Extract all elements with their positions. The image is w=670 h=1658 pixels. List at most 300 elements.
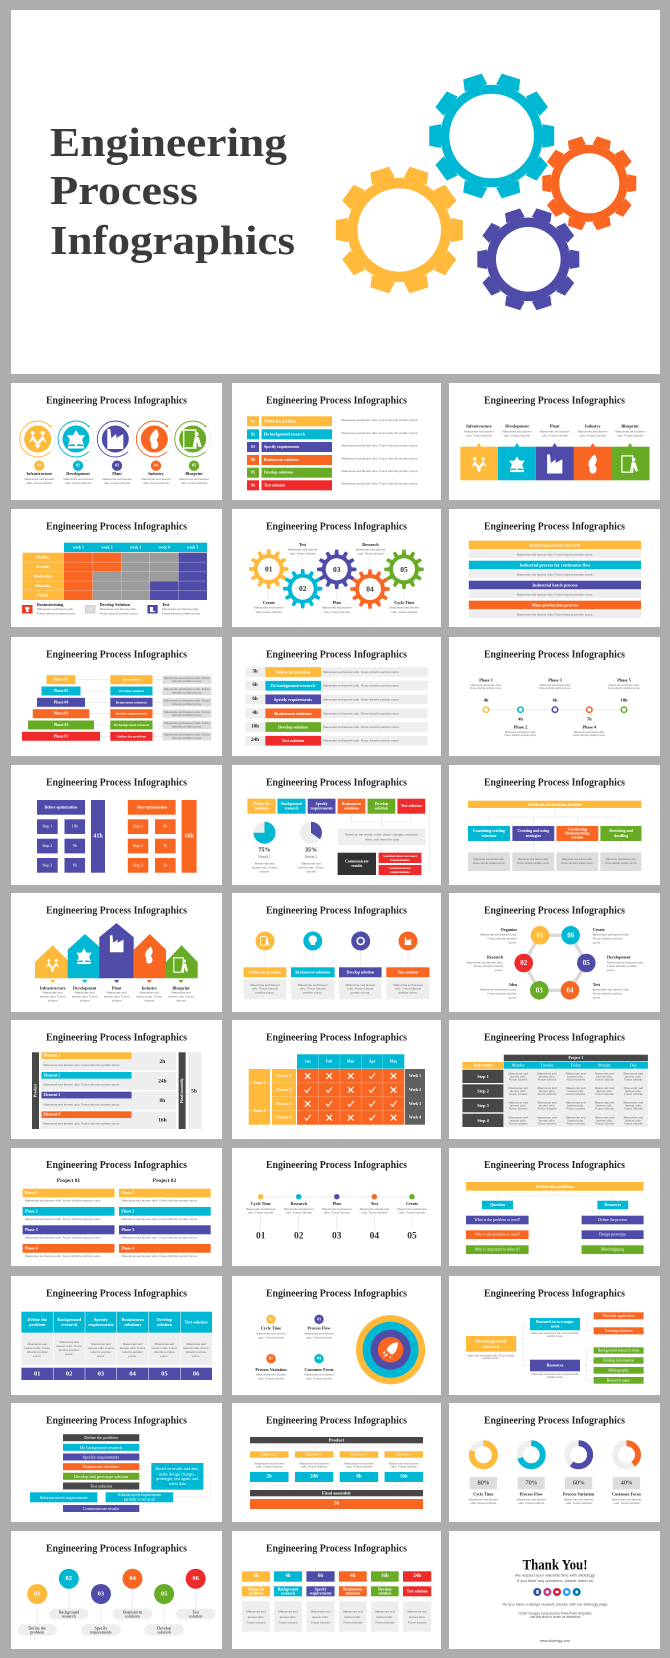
vertical bar: Final assembly: Final assembly [180,1078,184,1103]
deliverable cell: Deliverable [473,1063,493,1067]
arrow: Infrastructure: lobortis [48,998,58,1002]
box: Conducting Brainstorming session [556,826,598,871]
panel: five interlocking gears [232,509,441,627]
balloon 01: problem [30,1630,45,1634]
panel title: Engineering Process Infographics [484,650,625,660]
element 2: Maecenas sed laoreet odio. Fusce lobortis porttitor purus. [44,1083,120,1087]
top process boxes [247,799,425,814]
numbered bar 02 [247,429,418,439]
weeks: Week 4 [409,1116,421,1120]
numbered bar 05 [247,468,418,478]
row: Test solution: Test solution [282,738,305,743]
product bar [250,1437,423,1443]
row: Develop solution [245,722,428,732]
icon: four gears [336,73,636,311]
panel: numbered dot timeline [232,1148,441,1266]
top process boxes: requirements [311,807,333,811]
column headers: Background [57,1317,81,1322]
label: Plan: Plan [333,600,342,605]
column: Brainstorm solutions: Fusce lobortis [343,1620,363,1624]
check grid [249,1054,425,1125]
box: Examining existing solutions: Maecenas sed laoreet odio. [474,858,505,861]
descriptions: Maecenas sed laoreet odio. Fusce [164,710,210,714]
column: Brainstorm solutions: Brainstorm [343,1587,363,1591]
connectors [498,1191,613,1245]
element 2: odio. Fusce lobortis [301,1465,328,1469]
circle step: Infrastructure: Maecenas sed laoreet [25,477,54,481]
panel: five house arrows [11,893,222,1012]
box: Creating and using analogies: Creating and using [517,829,549,833]
circle step: Blueprint [167,414,218,485]
table header: weeks: week 2 [101,545,113,549]
website: www.slideegg.com [540,1639,570,1643]
column: Specify requirements: Specify [314,1587,327,1591]
resources branch: Resources [547,1364,564,1368]
step 03: 03 [332,1232,342,1242]
solution meets requirements [379,865,421,875]
block: Infrastructure: odio. Fusce lobortis [466,434,493,438]
numbered bar 06 [247,480,418,490]
solution does not meet requirements: Solution does not meet [383,854,418,858]
panel title: Engineering Process Infographics [484,1160,625,1171]
donut: Cycle Time 80%: odio. Fusce lobortis [470,1501,497,1505]
descriptions: lobortis porttitor purus. [172,724,202,728]
solution partially meets requirements: partially or not at all [124,1497,155,1501]
resources list: Mind mapping [601,1248,624,1252]
table days column: Friday [37,593,49,597]
project 02 column: Phase 2 [122,1209,134,1213]
card: Define the problem: Maecenas sed laoreet [250,983,280,987]
element 4 [385,1451,423,1482]
month header [297,1054,404,1069]
donut: Process Variation 60%: Maecenas sed laoreet [564,1497,594,1501]
phase 4: Phase 4 [582,724,597,730]
panel: before and after optimization [11,765,222,885]
column: Brainstorm solutions: solutions [345,1591,361,1595]
step 04 [360,1194,389,1242]
block: Industry: odio. Fusce lobortis [580,434,606,438]
balloon 02 [49,1569,88,1619]
metric: Cycle Time: 01 [269,1317,273,1321]
balloon 06: solution [189,1614,203,1618]
description row: purus. [192,1354,200,1358]
before optimization group: 8h [73,863,77,867]
descriptions: Maecenas sed laoreet odio. Fusce [164,687,210,691]
pie: 75 percent: 75% [258,847,270,853]
description row: Maecenas sed [186,1342,206,1346]
top process boxes: problem [255,807,269,811]
description grid: Maecenas sed [595,1115,615,1119]
description grid: Maecenas sed [624,1115,643,1119]
panel title: Engineering Process Infographics [46,650,187,660]
column: Test solution: Test solution [407,1589,428,1593]
element 2: Element 2 [44,1073,60,1077]
block: Development [498,424,536,480]
description grid: Fusce lobortis [538,1107,557,1111]
vertical bar: Product [32,1052,39,1129]
description grid: Fusce lobortis [538,1121,557,1125]
description grid: laoreet odio. [568,1104,584,1108]
project 01 column: Phase 1 [25,1191,38,1195]
description row: lobortis porttitor [154,1350,175,1354]
description grid: laoreet odio. [596,1104,613,1108]
panel: industrial process bars [449,509,660,627]
description grid: Maecenas sed [508,1101,528,1105]
row: Specify requirements: Maecenas sed laoreet odio. Fusce lobortis porttitor purus. [323,697,400,701]
column headers [21,1312,212,1333]
card: Develop solution: porttitor purus. [351,991,370,995]
box: Creating and using analogies: Fusce lobortis porttitor purus. [517,862,550,865]
step column [462,1070,503,1127]
flow connectors [352,806,430,870]
numbered bar 06: Test solution [264,483,286,487]
arrow: Industry: Maecenas sed [140,990,159,994]
communicate results box: results [351,864,363,868]
block: Development: odio. Fusce lobortis [504,434,531,438]
month header: Feb [326,1060,332,1064]
label: Create: odio. Fusce lobortis [256,610,282,614]
stem lines [261,1216,412,1231]
card: Test solution [386,932,430,999]
label: Development: purus. [607,968,616,972]
top bar: Methods of ideation include [528,802,582,807]
descriptions: lobortis porttitor purus. [172,690,202,694]
step column: Step 2 [477,1088,489,1094]
card: Define the problem: odio. Fusce lobortis [252,987,279,991]
stems [37,1589,196,1624]
target with rocket [356,1315,425,1384]
box: Examining existing solutions: Fusce lobortis porttitor purus. [473,862,505,865]
row: Brainstorm solutions: Brainstorm solutions [274,711,312,716]
label: Organize: Fusce lobortis porttitor [487,936,517,940]
table header: weeks: week 1 [73,545,84,549]
gear 04 [350,569,390,609]
circle step: Blueprint: Blueprint [185,471,203,476]
description grid: laoreet odio. [625,1104,642,1108]
description row: purus. [65,1352,73,1356]
box: Conducting Brainstorming session: Brainstorming [565,832,590,836]
box: Sketching and doodling: Fusce lobortis porttitor purus. [605,862,637,865]
day header: Day [630,1063,637,1067]
bar: work: Industrial process for work [529,542,581,548]
element 2 [295,1451,333,1482]
before optimization group: Step 2 [42,844,52,848]
description row: Maecenas sed [59,1340,79,1344]
column: Test solution: Fusce lobortis [408,1620,427,1624]
metric: Cycle Time: odio. Fusce lobortis [258,1335,285,1339]
month header: May [390,1060,397,1064]
card: Brainstorm solutions: porttitor purus. [303,991,323,995]
element 4 [41,1111,176,1129]
balloon 04: 04 [129,1575,136,1582]
pyramid [22,675,100,741]
description grid: laoreet odio. [539,1089,555,1093]
panel title: Engineering Process Infographics [266,396,407,406]
final hours bar [250,1499,423,1509]
label: Research: purus. [495,968,504,972]
block: Blueprint: Maecenas sed laoreet [615,430,645,434]
description grid: laoreet odio. [625,1118,642,1122]
arrow: Development: Development [73,986,97,990]
panel title: Engineering Process Infographics [46,522,187,532]
step 04: Maecenas sed laoreet [360,1207,389,1211]
description row: laoreet odio. Fusce [88,1346,114,1350]
root box: Maecenas sed laoreet odio. Fusce lobortis [468,1354,515,1358]
label: Idea: purus. [509,995,517,999]
description grid: Maecenas sed [508,1086,528,1090]
arrow: Plant: Plant [112,986,122,990]
panel title: Engineering Process Infographics [46,1160,187,1171]
column headers: solutions [124,1322,141,1327]
table grid [23,553,207,600]
panel: hour rows [232,637,441,756]
connectors [516,1316,594,1380]
label: Test [288,542,318,556]
description grid: laoreet odio. [596,1118,613,1122]
step 02: Maecenas sed laoreet [284,1207,314,1211]
bar: work [469,541,641,558]
block: Infrastructure: Maecenas sed laoreet [464,430,494,434]
row: Specify requirements: Specify requirements [274,697,312,702]
panel: four donuts [449,1403,660,1522]
description row: laoreet odio. Fusce [25,1346,50,1350]
balloon 04: solutions [125,1614,140,1618]
row: Brainstorm solutions [245,708,428,718]
metric: Process Variation: 02 [269,1357,273,1361]
hero title: Engineering [50,119,288,165]
pyramid: Phase 04 [54,700,68,704]
card: Test solution: odio. Fusce lobortis [395,987,422,991]
label: Plan [322,600,352,614]
panel: five circles with icons [11,383,222,500]
description grid: laoreet odio. [596,1074,613,1078]
project 02 column [119,1178,211,1258]
solution does not meet requirements [379,853,421,863]
description grid: Fusce lobortis [595,1121,614,1125]
description row: purus. [97,1354,105,1358]
row: Define the problem: 3h [252,670,258,674]
top bar: Define the problem [536,1184,574,1189]
bar: batch [469,581,641,598]
circle step: Plant: odio. Fusce lobortis [104,481,131,485]
column: Background research: 4h [285,1574,291,1579]
description row: lobortis porttitor [27,1350,48,1354]
table days column [23,553,64,600]
solution meets requirements: Solution meets requirements [40,1495,88,1500]
research branch: porttitor purus. [547,1335,563,1338]
number row: 06 [193,1370,200,1377]
donut: Customer Focus 40% [612,1443,641,1505]
description grid: Maecenas sed [624,1101,643,1105]
step 03: odio. Fusce lobortis [324,1211,350,1215]
label: Research: Maecenas sed laoreet [356,548,385,552]
label: Cycle Time [390,600,419,614]
panel: two projects phases [11,1148,222,1266]
pie: 35 percent: lobortis [306,870,316,874]
label: Test: Test [299,542,307,547]
donut: Customer Focus 40%: Customer Focus [612,1492,641,1496]
element 1: 2h [267,1474,272,1480]
table header: weeks: week 3 [130,545,141,549]
legend: Brainstorming: Fusce lobortis porttitor purus. [37,612,76,616]
panel: product elements with hours [11,1020,222,1139]
arrow: Blueprint: Maecenas sed [171,990,191,994]
element 3: 8h [356,1474,362,1480]
processes [272,1069,296,1125]
legend: Brainstorming [22,602,76,616]
after optimization group: Step 1 [133,825,143,829]
phase 1: Fusce lobortis porttitor purus. [470,687,502,690]
question box [482,1201,513,1209]
description grid: Maecenas sed [624,1086,643,1090]
label: Research: Fusce lobortis porttitor [474,964,503,968]
project 02 column: Maecenas sed laoreet odio. Fusce lobortis porttitor purus. [122,1235,198,1239]
arrow: Industry: lobortis [144,998,155,1002]
column: Test solution [403,1571,431,1632]
donut: Process Variation 60%: Process Variation [563,1492,595,1496]
row: Do background research: 6h [252,683,258,688]
circle step: Development: 02 [76,464,80,468]
label: Test: odio. Fusce lobortis [290,552,316,556]
box: Sketching and doodling: Sketching and [609,829,634,833]
row: Define the problem [245,667,428,677]
node 03 [530,981,549,1000]
research branch: Maecenas sed laoreet odio. Fusce lobortis [532,1332,579,1335]
descriptions: Maecenas sed laoreet odio. Fusce [164,721,210,725]
solution partially meets requirements: Solution meets requirements [118,1493,162,1497]
description row: purus. [160,1354,169,1358]
step 05: Maecenas sed laoreet [397,1207,427,1211]
metric: Process Variation [255,1354,287,1381]
legend: Test: Test [162,602,170,607]
numbered bar 02: Maecenas sed laoreet odio. Fusce lobortis porttitor purus. [342,431,418,435]
feedback box: make design changes, [159,1472,196,1478]
metric: Customer Focus: Maecenas sed laoreet [304,1373,334,1377]
description grid: Maecenas sed [537,1101,557,1105]
credit note [518,1611,592,1619]
bar: continuous flow: Maecenas sed laoreet odio. Fusce lobortis porttitor purus. [517,572,593,576]
row: Test solution: 24h [251,738,259,743]
element 1: Maecenas sed laoreet odio. Fusce lobortis porttitor purus. [44,1063,120,1067]
column: Define the problem: 3h [253,1574,259,1579]
numbered bar 05: Maecenas sed laoreet odio. Fusce lobortis porttitor purus. [342,469,418,473]
description grid: laoreet odio. [510,1089,527,1093]
block: Plant: Plant [550,424,560,428]
row: Define the problem: Define the problem [276,670,311,674]
phase 1: Maecenas sed laoreet odio. [471,684,502,687]
top process boxes: Background [281,802,303,806]
pyramid: Phase 05 [54,689,68,693]
label: Development: Fusce lobortis porttitor [607,964,637,968]
circle step: Blueprint: odio. Fusce lobortis [181,481,208,485]
step labels: Define the problem [117,734,146,738]
panel title: Engineering Process Infographics [46,906,187,916]
label: Development: Development [607,954,631,960]
donut: Cycle Time 80% [469,1443,498,1505]
step 01: Cycle Time [251,1201,271,1206]
communicate results box [338,853,376,875]
description grid: Maecenas sed [537,1115,557,1119]
pyramid: Phase 02 [54,723,68,727]
green leaves: Finding information [603,1358,634,1362]
after optimization group: 8h [163,825,167,829]
description row: lobortis porttitor [59,1348,79,1352]
descriptions: Maecenas sed laoreet odio. Fusce [164,698,210,702]
element 4: Element 4 [44,1113,60,1117]
label: Idea: Idea [509,982,518,987]
description row: laoreet odio. Fusce [56,1344,82,1348]
after optimization group: 7h [163,844,167,848]
descriptions: lobortis porttitor purus. [172,713,202,717]
column: Develop solution [371,1571,399,1632]
gear 03 [317,550,356,589]
numbered bar 03: Maecenas sed laoreet odio. Fusce lobortis porttitor purus. [342,444,418,448]
panel: six numbered bars [232,383,441,500]
feedback box: retest data [169,1481,186,1486]
card: Brainstorm solutions: Brainstorm solutions [295,970,331,974]
panel title: Engineering Process Infographics [266,906,407,916]
bar: mass production: Mass production process [532,602,579,608]
panel: six column table [11,1276,222,1395]
project 02 column: Phase 3 [122,1228,134,1232]
before optimization group: 41h [93,833,103,839]
balloon 01: 01 [34,1590,40,1598]
feedback box: prototype, test again, and [156,1476,199,1482]
donut: Process Flow 70%: Process Flow [520,1492,543,1496]
element 1: Maecenas sed laoreet [254,1461,284,1465]
node 06 [561,926,580,945]
project 01 column: Phase 2 [25,1209,38,1213]
donut: Process Variation 60% [563,1443,595,1505]
arrow: Infrastructure: Infrastructure [40,986,66,990]
description grid: laoreet odio. [625,1074,642,1078]
column: Background research: laoreet odio. [280,1615,296,1619]
card: Test solution: Test solution [398,970,419,974]
numbered bar 04 [247,455,418,465]
description grid: laoreet odio. [625,1089,642,1093]
label: Idea [480,982,518,999]
connectors [59,1467,210,1508]
social icons [533,1588,581,1596]
column: Define the problem: laoreet odio. [248,1615,264,1619]
panel: target with four metrics [232,1276,441,1395]
box: Sketching and doodling [600,826,642,871]
circle step: Industry: 04 [154,464,158,468]
weeks: Week 1 [409,1074,421,1078]
column: Define the problem: Define the [248,1587,265,1591]
arrow: Development [68,934,103,1002]
label: Research: Maecenas sed laoreet odio. [467,960,504,964]
donut: Customer Focus 40%: odio. Fusce lobortis [613,1501,640,1505]
teams: Team 2 [253,1109,265,1113]
element 3: Maecenas sed laoreet odio. Fusce lobortis porttitor purus. [44,1102,120,1106]
phase 1: 4h [484,698,489,702]
before optimization group: Before optimization [45,805,78,809]
circle step: Development [51,414,101,485]
teams: Team 1 [253,1081,265,1085]
arrow: Industry: Industry [142,986,158,990]
gear 05 [384,550,424,589]
column: Specify requirements [306,1571,335,1632]
column: Background research: Background [278,1587,299,1591]
step column: Step 1 [477,1074,489,1079]
circle step: Infrastructure: odio. Fusce lobortis [26,481,53,485]
column: Brainstorm solutions: 4h [350,1574,356,1579]
description grid: Fusce lobortis [624,1077,643,1081]
block: Industry: Industry [585,424,601,428]
number row: 02 [66,1370,72,1377]
description grid: Fusce lobortis [509,1107,528,1111]
